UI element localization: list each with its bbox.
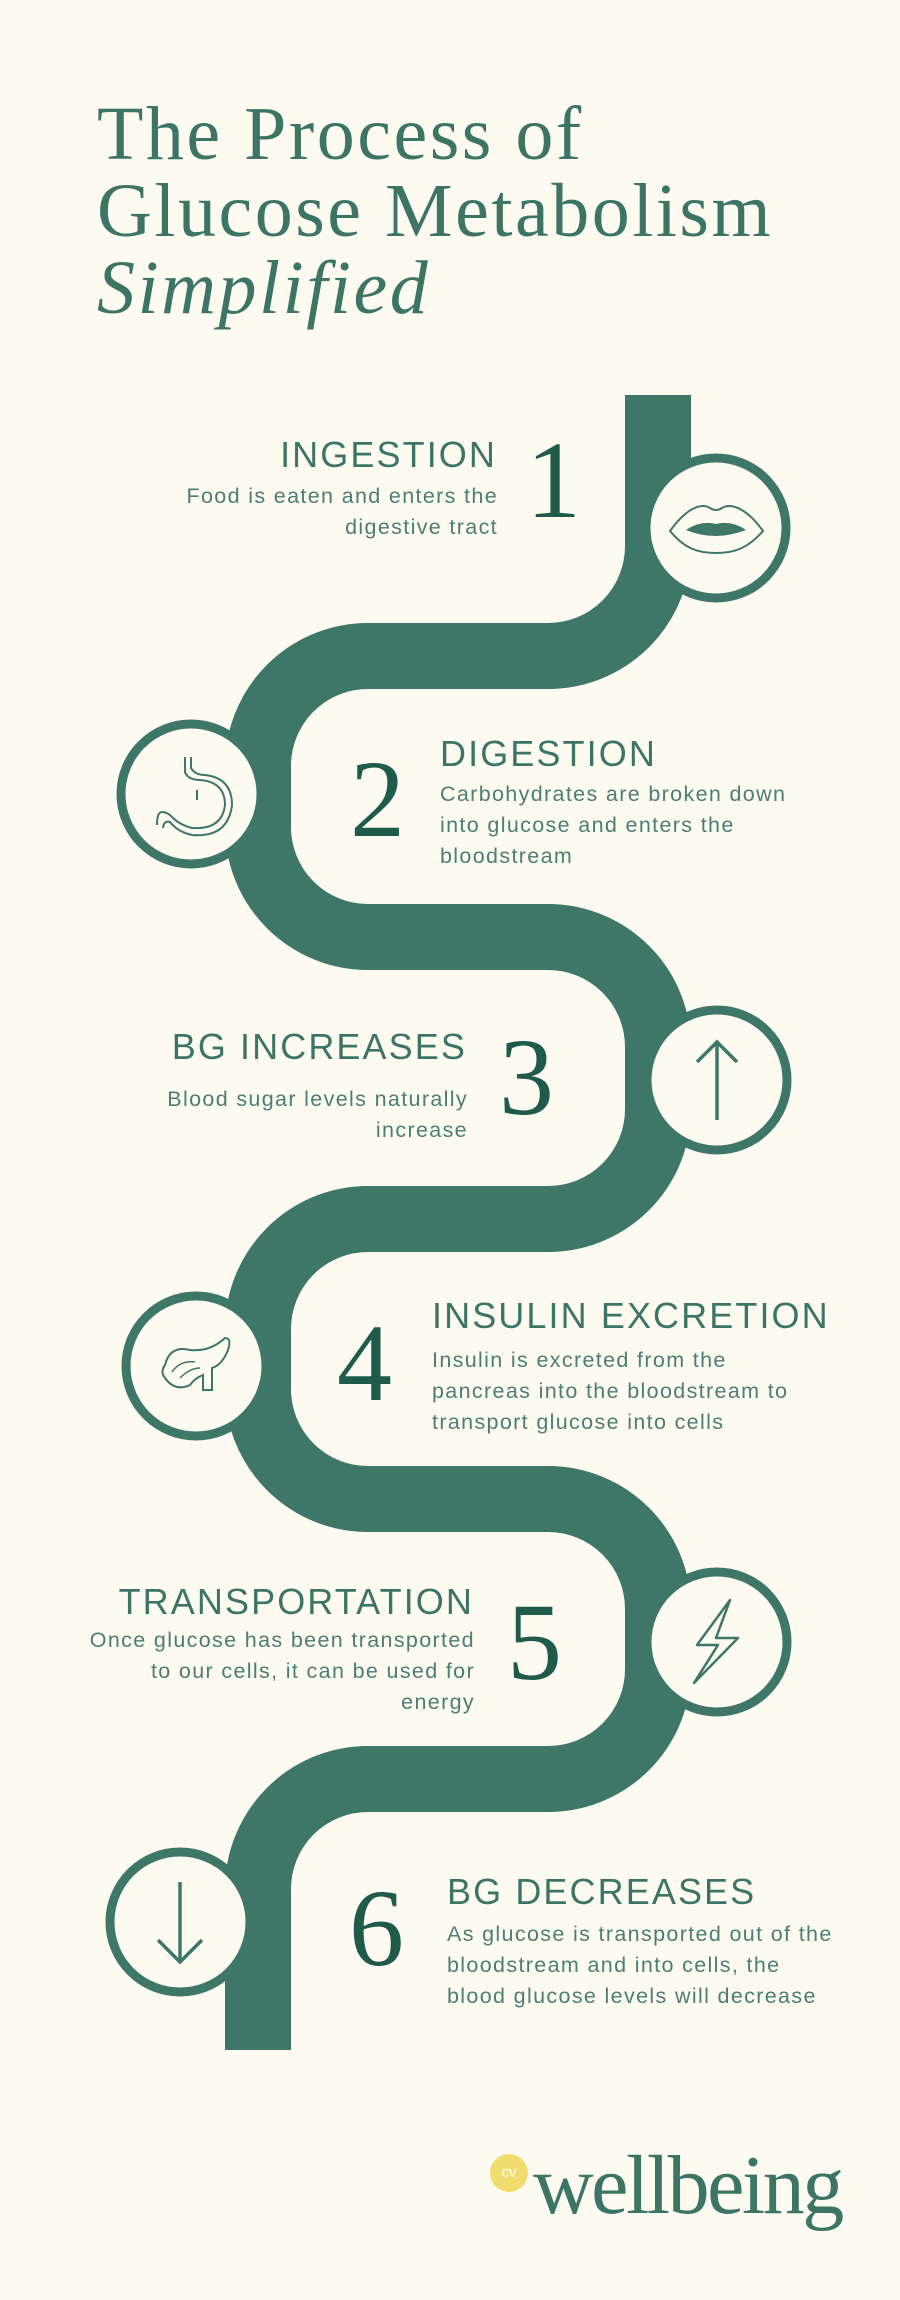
step 5 text	[90, 1628, 475, 1714]
title: The Process of	[97, 92, 584, 176]
logo badge	[490, 2154, 528, 2192]
step 6 text: bloodstream and into cells, the	[447, 1953, 780, 1977]
icon: pancreas	[126, 1296, 266, 1436]
step 4 number: 4	[337, 1302, 392, 1424]
step 4 text: pancreas into the bloodstream to	[432, 1379, 788, 1403]
step 1 number: 1	[526, 419, 581, 541]
step 3 text: increase	[376, 1118, 468, 1142]
icon: lips	[646, 458, 786, 598]
title: Glucose Metabolism	[97, 169, 773, 253]
icon: stomach	[121, 724, 261, 864]
icon: arrow down	[110, 1852, 250, 1992]
title: Simplified	[97, 246, 430, 330]
title	[97, 92, 773, 330]
step 5 text: energy	[401, 1690, 475, 1714]
step 2 text: into glucose and enters the	[440, 813, 735, 837]
step 3 heading: BG INCREASES	[172, 1026, 467, 1067]
step 5 number: 5	[507, 1581, 562, 1703]
step 1 heading: INGESTION	[280, 434, 497, 475]
step 5 heading: TRANSPORTATION	[119, 1581, 474, 1622]
step 2 text: Carbohydrates are broken down	[440, 782, 786, 806]
step 1 text: digestive tract	[345, 515, 498, 539]
step 2 text	[440, 782, 786, 868]
logo badge: cv	[502, 2164, 516, 2181]
logo	[490, 2139, 843, 2232]
logo wordmark: wellbeing	[533, 2139, 842, 2232]
step 6 text: blood glucose levels will decrease	[447, 1984, 817, 2008]
step 6 number: 6	[349, 1867, 404, 1989]
step 6 text: As glucose is transported out of the	[447, 1922, 833, 1946]
step 2 text: bloodstream	[440, 844, 573, 868]
step 3 text	[167, 1087, 468, 1142]
step 4 text: Insulin is excreted from the	[432, 1348, 727, 1372]
step 3 text: Blood sugar levels naturally	[167, 1087, 468, 1111]
step 5 text: Once glucose has been transported	[90, 1628, 475, 1652]
step 2 number: 2	[350, 738, 405, 860]
step 6 text	[447, 1922, 833, 2008]
step 4 heading: INSULIN EXCRETION	[432, 1295, 830, 1336]
step 6 heading: BG DECREASES	[447, 1871, 756, 1912]
icon: lightning	[647, 1572, 787, 1712]
step 4 text: transport glucose into cells	[432, 1410, 724, 1434]
icon: arrow up	[647, 1010, 787, 1150]
step 1 text: Food is eaten and enters the	[186, 484, 498, 508]
step 1 text	[186, 484, 498, 539]
step 2 heading: DIGESTION	[440, 733, 657, 774]
step 5 text: to our cells, it can be used for	[151, 1659, 475, 1683]
step 3 number: 3	[499, 1016, 554, 1138]
step 4 text	[432, 1348, 788, 1434]
